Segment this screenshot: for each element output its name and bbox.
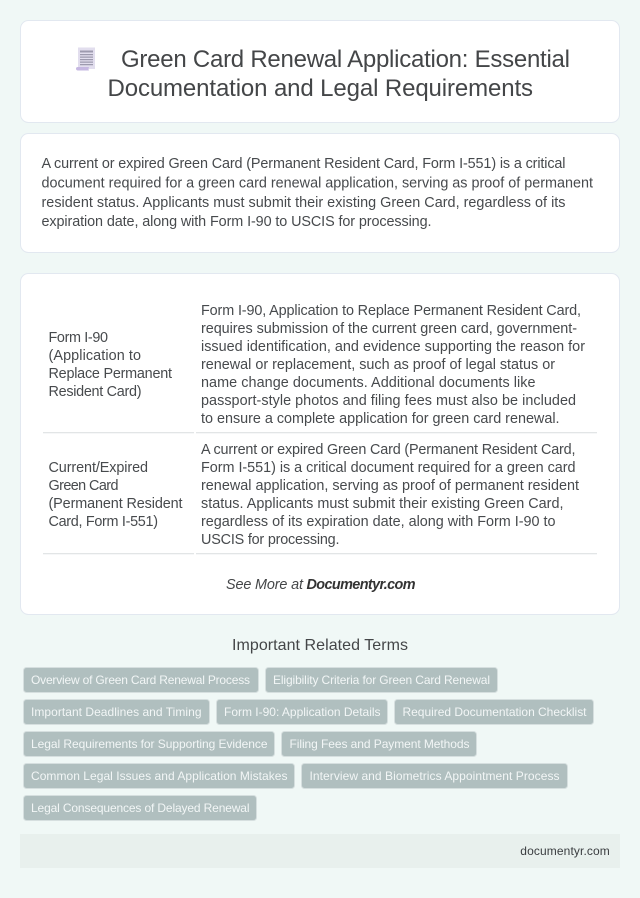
- tag: overview: [24, 668, 258, 692]
- tag: common issues: Common Legal Issues and Application Mistakes: [31, 769, 288, 783]
- tag list: related terms: [24, 668, 594, 820]
- row description: Form I-90: Form I-90, Application to Replace Permanent Resident Card,: [201, 303, 581, 319]
- text block: introduction: A current or expired Green Card (Permanent Resident Card, Form I-551) is a critical: [42, 156, 566, 172]
- panel: introduction: [20, 134, 620, 252]
- tag: filing fees: Filing Fees and Payment Methods: [290, 737, 470, 751]
- tag: form I-90: [216, 700, 388, 724]
- row label: Form I-90: Form I-90: [48, 330, 108, 346]
- table row: Current/Expired Green Card: [48, 442, 579, 548]
- tag: eligibility: Eligibility Criteria for Green Card Renewal: [273, 673, 490, 687]
- tag: checklist: Required Documentation Checklist: [402, 705, 587, 719]
- row description: Current/Expired Green Card: USCIS for processing.: [201, 532, 340, 548]
- row label: Current/Expired Green Card: (Permanent Resident: [48, 496, 182, 512]
- tag: supporting evidence: [24, 732, 274, 756]
- table row: Form I-90: [48, 303, 585, 427]
- row description: Form I-90: passport-style photos and filing fees must also be included: [201, 393, 576, 409]
- tag: form I-90: Form I-90: Application Details: [224, 705, 380, 719]
- tag: supporting evidence: Legal Requirements for Supporting Evidence: [31, 737, 268, 751]
- row description: Current/Expired Green Card: Form I-551) is a critical document required for a green card: [201, 460, 576, 476]
- tag: checklist: [394, 700, 594, 724]
- row label: Current/Expired Green Card: Current/Expired: [48, 460, 148, 476]
- row description: Form I-90: renewal or replacement, such as proof of legal status or: [201, 357, 555, 373]
- tag: common issues: [24, 764, 294, 788]
- text block: introduction: expiration date, along with Form I-90 to USCIS for processing.: [42, 214, 432, 230]
- footer source: documentyr.com: [520, 844, 610, 858]
- row label: Current/Expired Green Card: Green Card: [48, 478, 118, 494]
- row description: Form I-90: name change documents. Additional documents like: [201, 375, 536, 391]
- heading: important related terms: Important Related Terms: [232, 637, 408, 654]
- see more link: See More at: [226, 577, 304, 593]
- row label: Form I-90: Replace Permanent: [48, 366, 172, 382]
- row description: Form I-90: issued identification, and evidence supporting the reason for: [201, 339, 585, 355]
- tag: legal consequences: Legal Consequences of Delayed Renewal: [31, 801, 250, 815]
- see more link: Documentyr.com: [306, 577, 416, 593]
- footer bar: [20, 834, 620, 868]
- title: Green Card Renewal Application: Essential: [121, 46, 570, 73]
- text block: introduction: document required for a green card renewal application, serving as proof of permanent: [42, 176, 593, 192]
- row label: Form I-90: Resident Card): [48, 384, 142, 400]
- row description: Current/Expired Green Card: A current or expired Green Card (Permanent Resident Card,: [201, 442, 576, 458]
- row description: Form I-90: to ensure a complete application for green card renewal.: [201, 411, 560, 427]
- text block: introduction: resident status. Applicants must submit their existing Green Card, regardless of its: [42, 195, 566, 211]
- tag: eligibility: [266, 668, 498, 692]
- row label: Form I-90: (Application to: [48, 348, 141, 364]
- tag: legal consequences: [24, 796, 256, 820]
- panel: title header: [20, 20, 620, 122]
- row description: Current/Expired Green Card: status. Applicants must submit their existing Green Card,: [201, 496, 564, 512]
- row description: Form I-90: requires submission of the current green card, government-: [201, 321, 577, 337]
- tag: deadlines: Important Deadlines and Timing: [31, 705, 202, 719]
- panel: documents table: [20, 274, 620, 614]
- tag: overview: Overview of Green Card Renewal Process: [31, 673, 250, 687]
- tag: filing fees: [282, 732, 476, 756]
- row description: Current/Expired Green Card: regardless of its expiration date, along with Form I-90 to: [201, 514, 556, 530]
- title: Documentation and Legal Requirements: [108, 75, 533, 102]
- row label: Current/Expired Green Card: Card, Form I-551): [48, 514, 158, 530]
- tag: deadlines: [24, 700, 210, 724]
- row description: Current/Expired Green Card: renewal application, serving as proof of permanent resident: [201, 478, 579, 494]
- tag: interview: [302, 764, 568, 788]
- tag: interview: Interview and Biometrics Appointment Process: [310, 769, 560, 783]
- icon: document receipt: [76, 48, 95, 70]
